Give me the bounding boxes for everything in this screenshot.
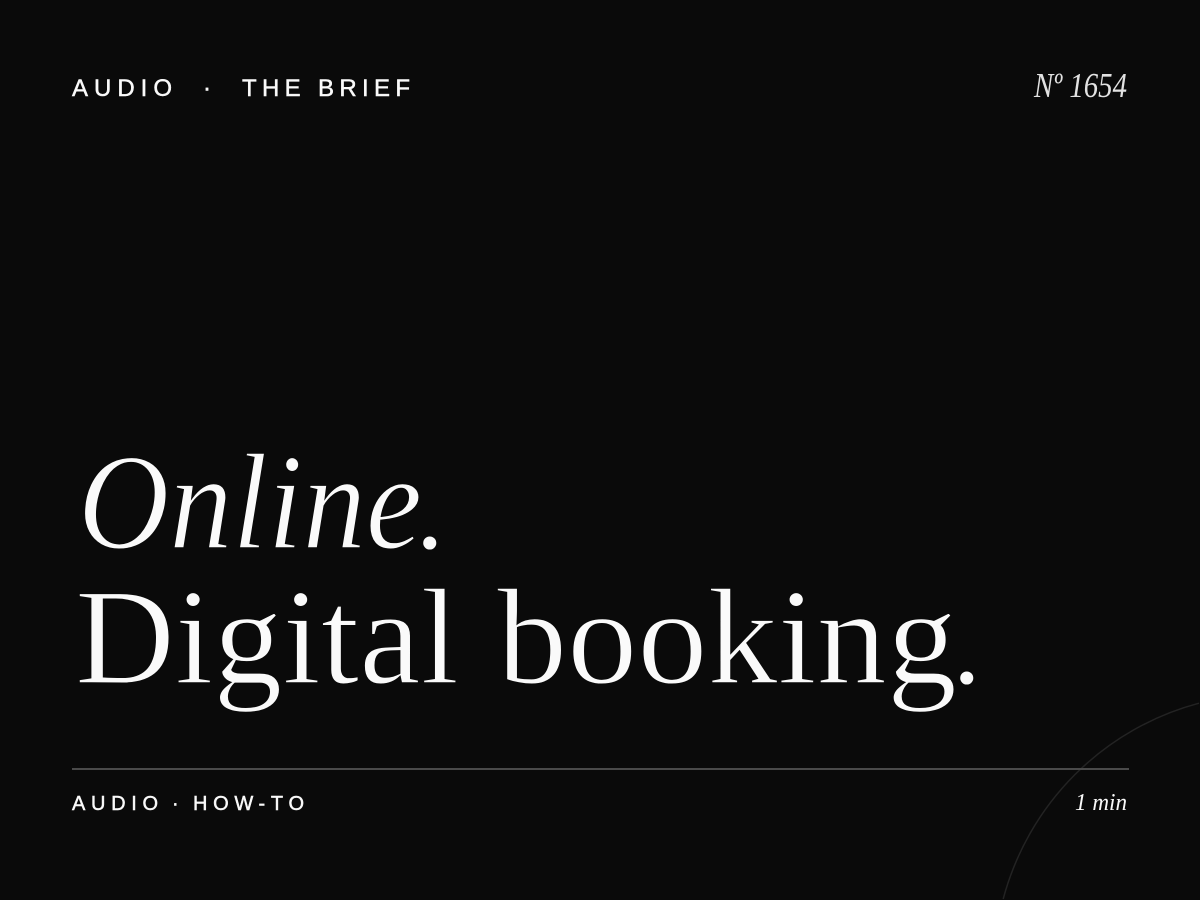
title line 1: .: [416, 450, 444, 572]
decorative arc: [1003, 703, 1199, 899]
title line 1: Online: [78, 426, 422, 578]
read time: 1 min: [1075, 790, 1127, 816]
title line 2: .: [953, 585, 980, 707]
header label: [72, 75, 410, 102]
footer label: [72, 793, 304, 815]
title line 2: [75, 561, 980, 713]
title: [75, 426, 980, 713]
header label: THE BRIEF: [242, 75, 410, 102]
footer label: AUDIO: [72, 793, 158, 815]
header label: AUDIO: [72, 75, 172, 102]
footer label: HOW-TO: [193, 793, 304, 815]
header label: ·: [203, 75, 211, 102]
issue number: Nº 1654: [1033, 66, 1127, 105]
title line 2: booking: [497, 561, 957, 713]
footer label: ·: [172, 793, 179, 815]
title line 2: Digital: [75, 561, 459, 713]
